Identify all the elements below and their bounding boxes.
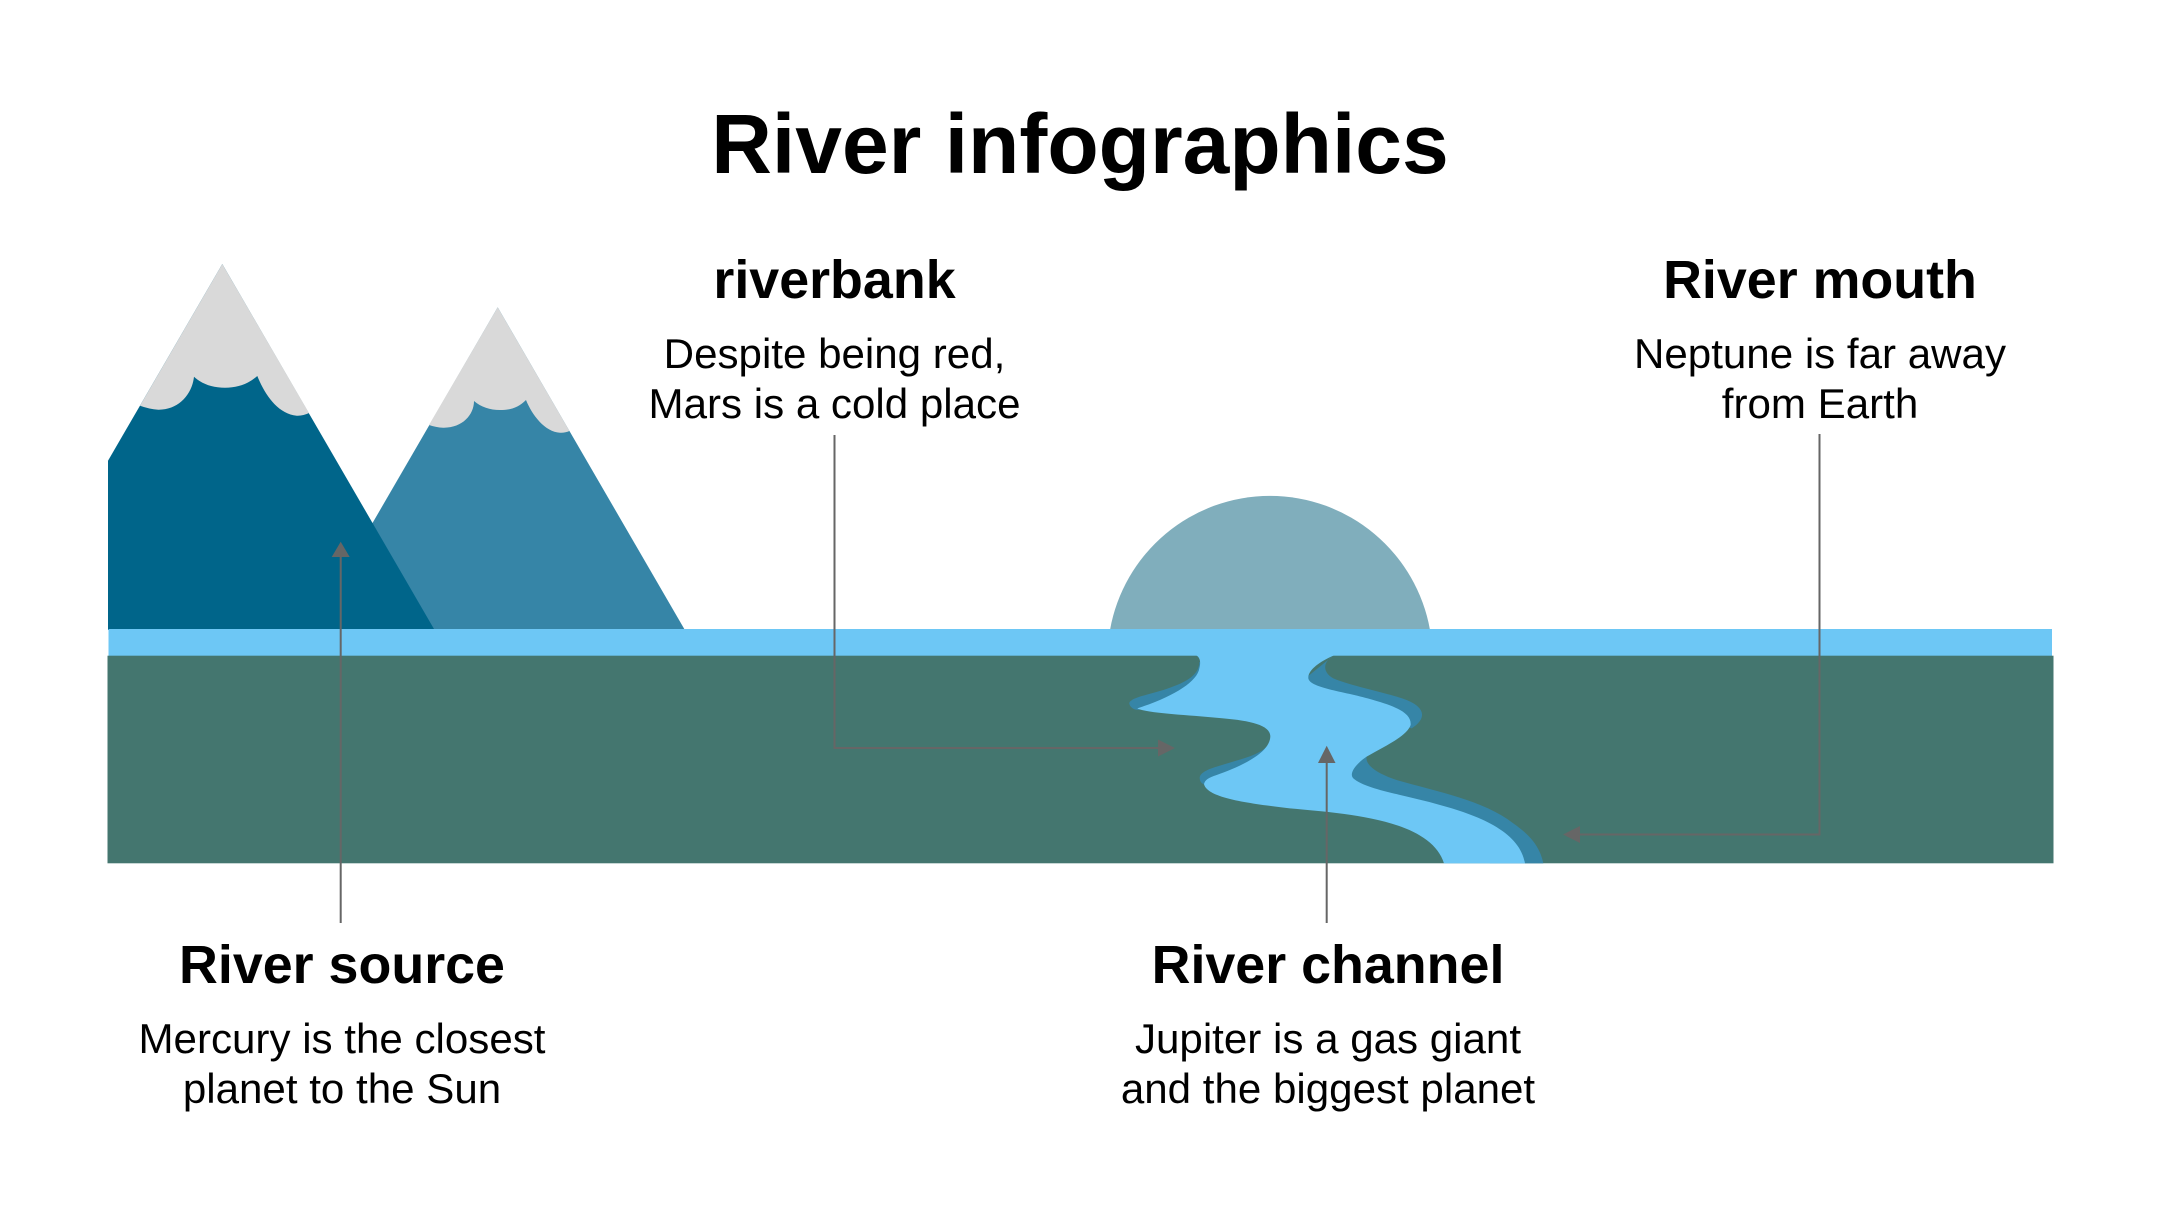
- big mountain: [108, 264, 434, 630]
- arrow: riverbank: [834, 435, 1175, 756]
- arrow: river source: [332, 542, 350, 923]
- ground: [108, 656, 2054, 863]
- callout: riverbank: [649, 250, 1020, 427]
- callout: river channel: Jupiter is a gas giant: [1135, 1015, 1521, 1062]
- callout: river mouth: River mouth: [1663, 250, 1977, 310]
- river: [1129, 652, 1543, 863]
- callout: river source: Mercury is the closest: [138, 1015, 546, 1062]
- callout: river source: River source: [179, 935, 505, 995]
- callout: riverbank: riverbank: [713, 250, 956, 310]
- callout: riverbank: Despite being red,: [664, 330, 1005, 377]
- water band: [108, 629, 2052, 656]
- callout: river channel: [1121, 935, 1535, 1112]
- river bank shading: [1129, 656, 1543, 863]
- callout: river source: planet to the Sun: [183, 1065, 501, 1112]
- callout: river source: [138, 935, 546, 1112]
- big mountain snow cap: [140, 264, 309, 416]
- callout: river mouth: Neptune is far away: [1634, 330, 2006, 377]
- small mountain snow cap: [429, 307, 570, 433]
- sun / hill semicircle: [1110, 496, 1430, 630]
- callout: riverbank: Mars is a cold place: [649, 380, 1020, 427]
- callout: river channel: River channel: [1152, 935, 1504, 995]
- callout: river channel: and the biggest planet: [1121, 1065, 1535, 1112]
- callout: river mouth: [1634, 250, 2006, 427]
- arrow: river mouth: [1563, 434, 1820, 843]
- small mountain: [311, 307, 684, 629]
- river water: [1137, 652, 1525, 863]
- arrow: river channel: [1318, 746, 1336, 923]
- title: River infographics: [711, 97, 1449, 191]
- callout: river mouth: from Earth: [1722, 380, 1918, 427]
